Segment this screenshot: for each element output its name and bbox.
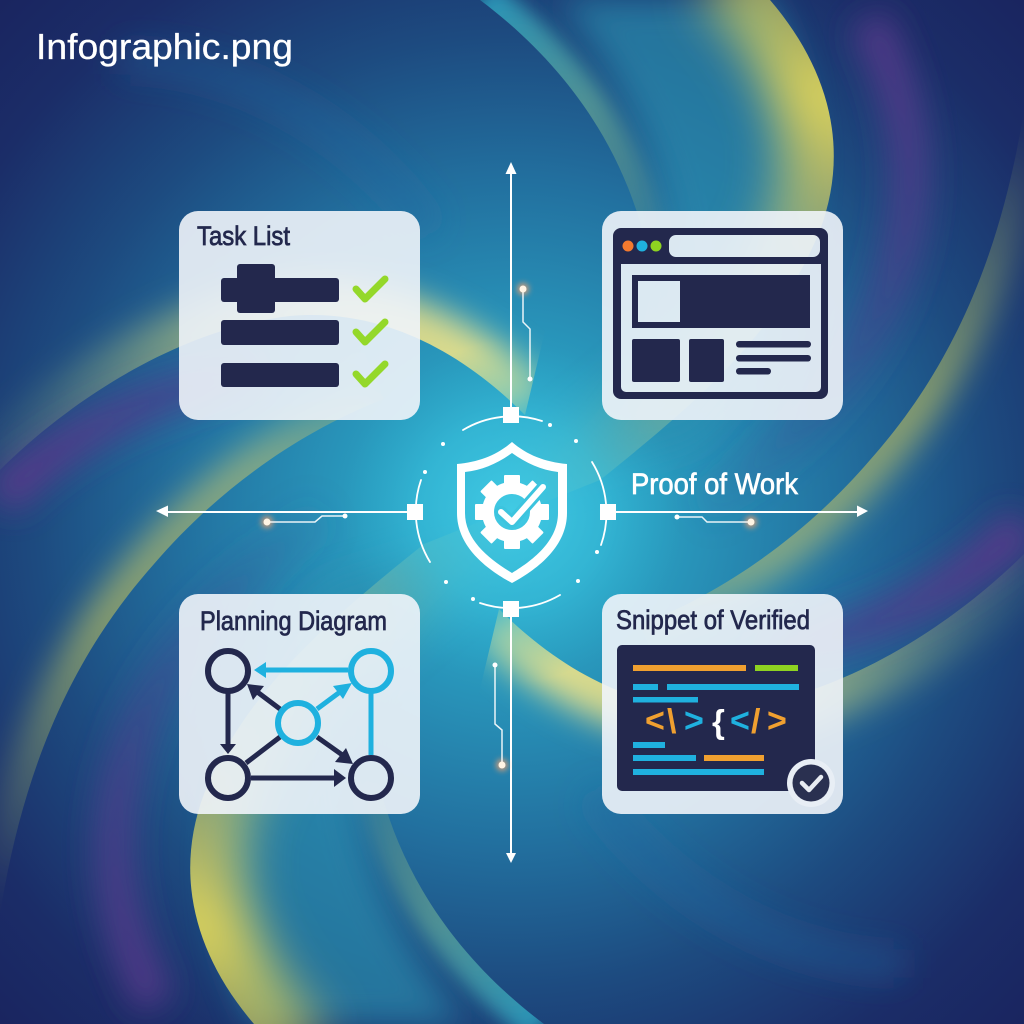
horizontal axis with arrows: [156, 506, 868, 517]
code symbols: >: [767, 702, 787, 740]
icon: verified badge: [787, 759, 835, 807]
dark connectors: [228, 688, 348, 778]
heading: task list: Task List: [197, 221, 290, 251]
circuit trace: top: [517, 283, 532, 382]
cyan arrowheads: [254, 662, 352, 699]
code editor panel: [617, 645, 815, 791]
code symbols: {: [712, 703, 725, 740]
check mark: [501, 487, 543, 522]
browser frame: [613, 228, 828, 399]
code symbols: \: [667, 703, 677, 741]
panel: planning diagram: [179, 594, 420, 814]
code lines: [633, 665, 799, 775]
vertical axis with arrows: [506, 162, 516, 863]
heading: planning diagram: Planning Diagram: [200, 606, 387, 636]
circuit trace: right: [674, 514, 757, 528]
dark arrowheads: [220, 684, 353, 787]
gear: [475, 475, 549, 549]
heading: snippet of verified: Snippet of Verified: [616, 605, 810, 635]
page layout blocks: [632, 275, 811, 382]
title: Infographic.png: [36, 26, 293, 67]
icon: shield with gear and check: [457, 442, 567, 583]
panel: browser window: [602, 211, 843, 420]
code symbols: [645, 702, 787, 741]
code symbols: /: [751, 703, 761, 741]
cyan connectors: [260, 670, 371, 755]
label: proof of work: Proof of Work: [631, 468, 799, 501]
code symbols: <: [730, 702, 750, 740]
circuit trace: bottom: [492, 662, 508, 771]
window control dots: [622, 240, 662, 252]
diagram nodes: [208, 651, 391, 798]
circuit trace: left: [261, 514, 348, 528]
code symbols: <: [645, 702, 665, 740]
code symbols: >: [684, 702, 704, 740]
panel: verified code snippet: [602, 594, 843, 814]
icon: green check marks: [356, 279, 385, 384]
icon: task bars: [221, 264, 339, 387]
panel: task list: [179, 211, 420, 420]
central ring with nodes: [407, 407, 616, 617]
